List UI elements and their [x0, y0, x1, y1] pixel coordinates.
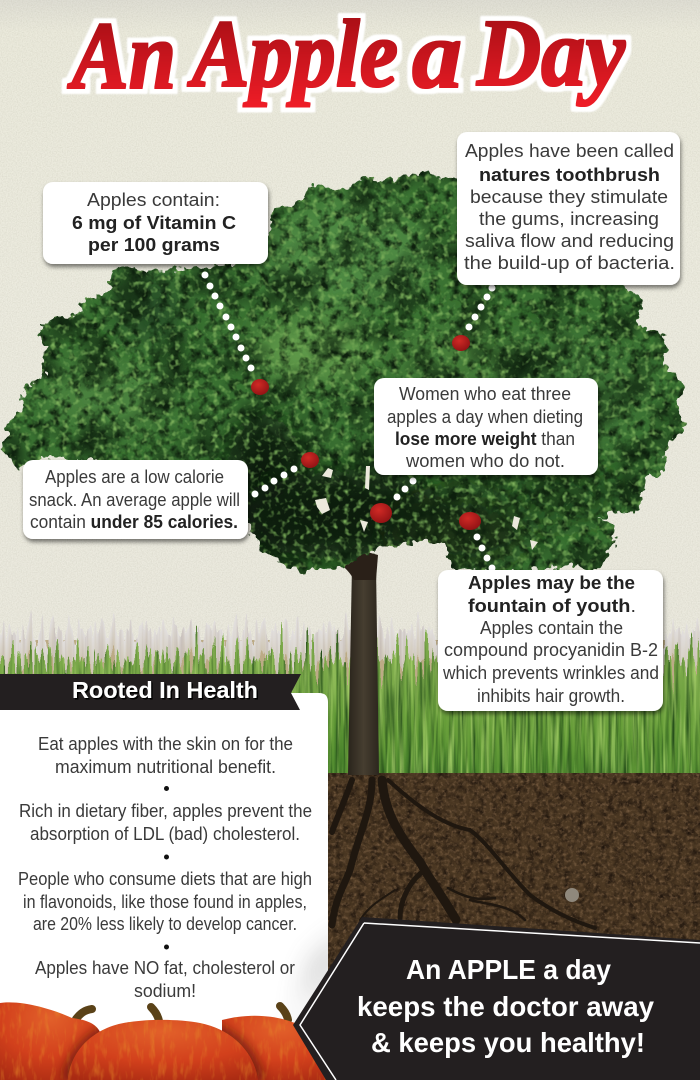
dotted connector: toothbrush: [466, 284, 496, 330]
callout: natures toothbrush: because they stimulate: [470, 186, 668, 207]
callout: lose more weight: [374, 378, 598, 475]
callout: vitamin C: 6 mg of Vitamin C: [72, 212, 236, 233]
health facts list: Rich in dietary fiber, apples prevent the: [19, 800, 312, 821]
pebble: [565, 888, 579, 902]
callout: lose more weight: apples a day when dieting: [387, 406, 583, 427]
callout: natures toothbrush: Apples have been called: [465, 140, 674, 161]
title: a: [412, 1, 462, 108]
title: Day: [476, 0, 625, 106]
icon: right apple: [222, 1006, 340, 1080]
dotted connector: vitamin C: [202, 272, 254, 372]
health facts list: People who consume diets that are high: [18, 868, 312, 889]
callout: natures toothbrush: [457, 132, 680, 285]
tree trunk: [348, 565, 379, 775]
banner: rooted in health: [0, 674, 301, 710]
badge: an apple a day: & keeps you healthy!: [371, 1027, 645, 1058]
callout: lose more weight: women who do not.: [405, 450, 565, 471]
dotted connector: youth: [474, 534, 496, 572]
callout: natures toothbrush: the build-up of bacteria.: [464, 252, 675, 273]
callout: vitamin C: per 100 grams: [88, 234, 220, 255]
callout: fountain of youth: fountain of youth .: [468, 595, 636, 616]
callout: natures toothbrush: natures toothbrush: [479, 164, 660, 185]
banner: rooted in health: Rooted In Health: [72, 677, 258, 703]
badge: an apple a day: keeps the doctor away: [357, 991, 654, 1022]
red apples on tree: [251, 335, 481, 530]
callout: vitamin C: Apples contain:: [87, 189, 220, 210]
callout: low calorie: [23, 460, 248, 539]
badge: an apple a day: [293, 917, 700, 1080]
badge: an apple a day: An APPLE a day: [406, 954, 611, 985]
title: An: [68, 2, 176, 109]
health facts list: [18, 733, 312, 1001]
callout: low calorie: Apples are a low calorie: [45, 466, 224, 487]
tree branches: [305, 548, 378, 580]
shadow behind center apple: [62, 1016, 264, 1080]
health facts list: Apples have NO fat, cholesterol or: [35, 957, 295, 978]
tree roots: [332, 780, 595, 928]
callout: fountain of youth: inhibits hair growth.: [477, 685, 625, 706]
icon: left apple: [0, 1002, 100, 1080]
callout: lose more weight: lose more weight than: [395, 428, 575, 449]
callout: natures toothbrush: saliva flow and reducing: [465, 230, 674, 251]
health facts list: Eat apples with the skin on for the: [38, 733, 293, 754]
title: [68, 0, 625, 109]
tan reeds band: [0, 640, 700, 710]
callout: fountain of youth: which prevents wrinkles and: [442, 662, 659, 683]
title: Apple: [188, 0, 398, 107]
green grass: [0, 660, 700, 830]
callout: lose more weight: Women who eat three: [399, 383, 571, 404]
panel: rooted in health: [0, 693, 328, 1032]
health facts list: maximum nutritional benefit.: [55, 756, 276, 777]
gaps in canopy: [315, 466, 538, 550]
callout: low calorie: contain under 85 calories.: [30, 511, 238, 532]
callout: low calorie: snack. An average apple will: [29, 489, 240, 510]
dotted connector: weight: [394, 478, 416, 500]
callout: fountain of youth: compound procyanidin B-2: [444, 639, 658, 660]
paper background: [0, 0, 700, 800]
callout: natures toothbrush: the gums, increasing: [479, 208, 659, 229]
dotted connector: calories: [252, 466, 298, 498]
health facts list: in flavonoids, like those found in apples,: [23, 891, 307, 912]
panel shadow from badge: [296, 934, 328, 1006]
callout: fountain of youth: Apples may be the: [468, 572, 635, 593]
tree canopy: [3, 170, 685, 572]
health facts list: sodium!: [134, 980, 196, 1001]
apples at bottom: [0, 1002, 340, 1080]
health facts list: are 20% less likely to develop cancer.: [33, 913, 297, 934]
callout: fountain of youth: Apples contain the: [480, 617, 623, 638]
icon: center apple: [68, 1007, 258, 1080]
soil: [0, 773, 700, 1080]
callout: vitamin C: [43, 182, 268, 264]
callout: fountain of youth: [438, 570, 663, 711]
pale grass tips: [0, 630, 700, 668]
health facts list: absorption of LDL (bad) cholesterol.: [30, 823, 300, 844]
